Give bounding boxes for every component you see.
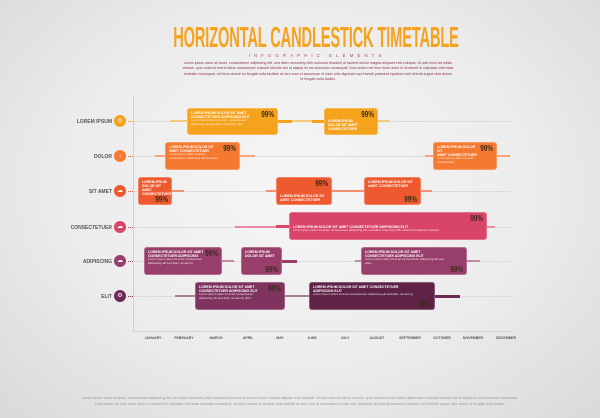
box: Lorem ipsum dolor sit amet consectetuer adipiscing elit sed diam nonummy nibh [199,292,253,300]
box: Lorem ipsum dolor sit amet, consectetuer adipiscing elit sed diam nonummy nibh [191,118,246,126]
box: 99% [268,284,281,293]
subtitle: INFOGRAPHIC ELEMENTS [249,53,385,58]
month labels: SEPTEMBER [399,336,421,340]
row guides [133,121,511,122]
box [289,212,487,240]
footer text: Lorem ipsum dolor sit amet, consectetuer adipiscing elit, sed diam nonummy nibh euismod tincidunt ut laoreet dolore magna aliquam erat volutpat. Ut wisi enim ad minim veniam, quis nostrud exerci tation ullamcorper suscipit lobortis nisl ut aliquip ex ea commodo consequat. Duis autem vel eum iriure dolor in hendrerit in vulputate velit esse molestie consequat, vel illum dolore eu feugiat nulla facilisis at vero eros et accumsan et iusto odio dignissim qui blandit praesent luptatum zzril delenit augue duis dolore te feugait nulla facilisi. [82,396,518,406]
box: DOLOR SIT AMET [328,123,358,127]
icon [114,290,126,302]
month labels: DECEMBER [496,336,516,340]
icon: ☁ [117,224,123,230]
box: AMET CONSECTETUER [437,153,477,157]
month labels: JUNE [307,336,317,340]
month labels: OCTOBER [433,336,451,340]
month labels: JANUARY [145,336,161,340]
row 5: adipiscing: ADIPISCING [83,259,112,265]
box: CONSECTETUER [328,127,357,131]
box: CONSECTETUER ADIPISCING [148,254,198,258]
box: LOREM IPSUM DOLOR SIT AMET [199,285,254,289]
box: LOREM IPSUM DOLOR SIT AMET [148,250,203,254]
box: LOREM IPSUM DOLOR SIT [169,145,214,149]
box: LOREM IPSUM DOLOR SIT [437,145,475,153]
icon [114,255,126,267]
box [276,177,332,205]
box: CONSECTETUER ADIPISCING ELIT [191,115,250,119]
box [165,142,240,170]
box: LOREM IPSUM DOLOR SIT AMET [191,111,246,115]
box: 99% [470,214,483,223]
icon [114,115,126,127]
icon [114,221,126,233]
icon: ⚙ [117,293,123,299]
box: LOREM IPSUM DOLOR SIT [280,194,325,198]
box: AMET CONSECTETUER [280,198,320,202]
box: 99% [361,110,374,119]
icon: ☁ [117,188,123,194]
box: 99% [205,249,218,258]
box [433,142,497,170]
icon: ↓ [118,153,122,159]
box: 99% [261,110,274,119]
box: 99% [418,300,431,309]
box: 99% [265,265,278,274]
box [138,177,172,205]
intro paragraph: Lorem ipsum dolor sit amet, consectetuer adipiscing elit, sed diam nonummy nibh euismod tincidunt ut laoreet dolore magna aliquam erat volutpat. Ut wisi enim ad minim veniam, quis nostrud exerci tation ullamcorper suscipit lobortis nisl ut aliquip ex ea commodo consequat. Duis autem vel eum iriure dolor in hendrerit in vulputate velit esse molestie consequat, vel illum dolore eu feugiat nulla facilisis at vero eros et accumsan et iusto odio dignissim qui blandit praesent luptatum zzril delenit augue duis dolore te feugait nulla facilisi. [183,61,453,81]
box: DOLOR SIT AMET [245,254,275,258]
box: LOREM IPSUM DOLOR SIT AMET CONSECTETUER ADIPISCING ELIT [293,225,408,229]
box: 99% [223,144,236,153]
box [187,108,278,135]
box: CONSECTETUER ADIPISCING ELIT [199,289,258,293]
box: LOREM IPSUM DOLOR SIT [368,180,413,184]
box [195,282,285,310]
box: Lorem ipsum dolor sit amet consectetuer adipiscing elit sed diam nonummy [148,257,202,265]
box [324,108,378,135]
box [364,177,421,205]
row 2: dolor: DOLOR [94,154,112,160]
month labels: AUGUST [370,336,384,340]
row 3: sit amet: SIT AMET [89,189,112,195]
box: Lorem ipsum dolor sit amet consectetuer adipiscing elit sed diam [365,257,444,265]
box: LOREM IPSUM [142,180,167,184]
box: Lorem ipsum dolor sit amet consectetuer [437,156,473,164]
month labels: JULY [341,336,349,340]
title: HORIZONTAL CANDLESTICK TIMETABLE [173,22,459,54]
box: 99% [480,144,493,153]
icon: ☁ [117,258,123,264]
month labels: NOVEMBER [463,336,483,340]
icon [114,185,126,197]
box: CONSECTETUER [142,192,171,196]
icon: ◎ [117,118,123,124]
row 4: consectetuer: CONSECTETUER [71,225,112,231]
month labels: APRIL [243,336,253,340]
box [241,247,282,275]
box: Lorem ipsum dolor sit amet, consectetuer adipiscing elit, sed diam nonummy nibh euismod tincidunt ut laoreet [293,228,439,232]
box: Lorem ipsum dolor sit amet consectetuer adipiscing elit sed diam [169,152,218,160]
month labels: MAY [276,336,284,340]
month labels: FEBRUARY [174,336,194,340]
box: 99% [155,195,168,204]
box: LOREM IPSUM DOLOR SIT AMET [365,250,420,254]
row 6: elit: ELIT [101,294,112,300]
box: LOREM IPSUM [245,250,270,254]
icon [114,150,126,162]
axis [133,96,134,332]
box [144,247,222,275]
label: LOREM IPSUM [77,119,112,125]
month labels: MARCH [209,336,223,340]
box: AMET CONSECTETUER [368,184,408,188]
box: CONSECTETUER ADIPISCING ELIT [365,254,424,258]
box: LOREM IPSUM [328,119,353,123]
box: LOREM IPSUM DOLOR SIT AMET CONSECTETUER ADIPISCING ELIT [313,285,398,293]
box [309,282,435,310]
box: 99% [315,179,328,188]
box: DOLOR SIT AMET [142,184,161,192]
box: 99% [404,195,417,204]
box: 99% [450,265,463,274]
box [361,247,467,275]
box: Lorem ipsum dolor sit amet consectetuer adipiscing elit sed diam nonummy [313,292,413,296]
box: AMET CONSECTETUER [169,149,209,153]
